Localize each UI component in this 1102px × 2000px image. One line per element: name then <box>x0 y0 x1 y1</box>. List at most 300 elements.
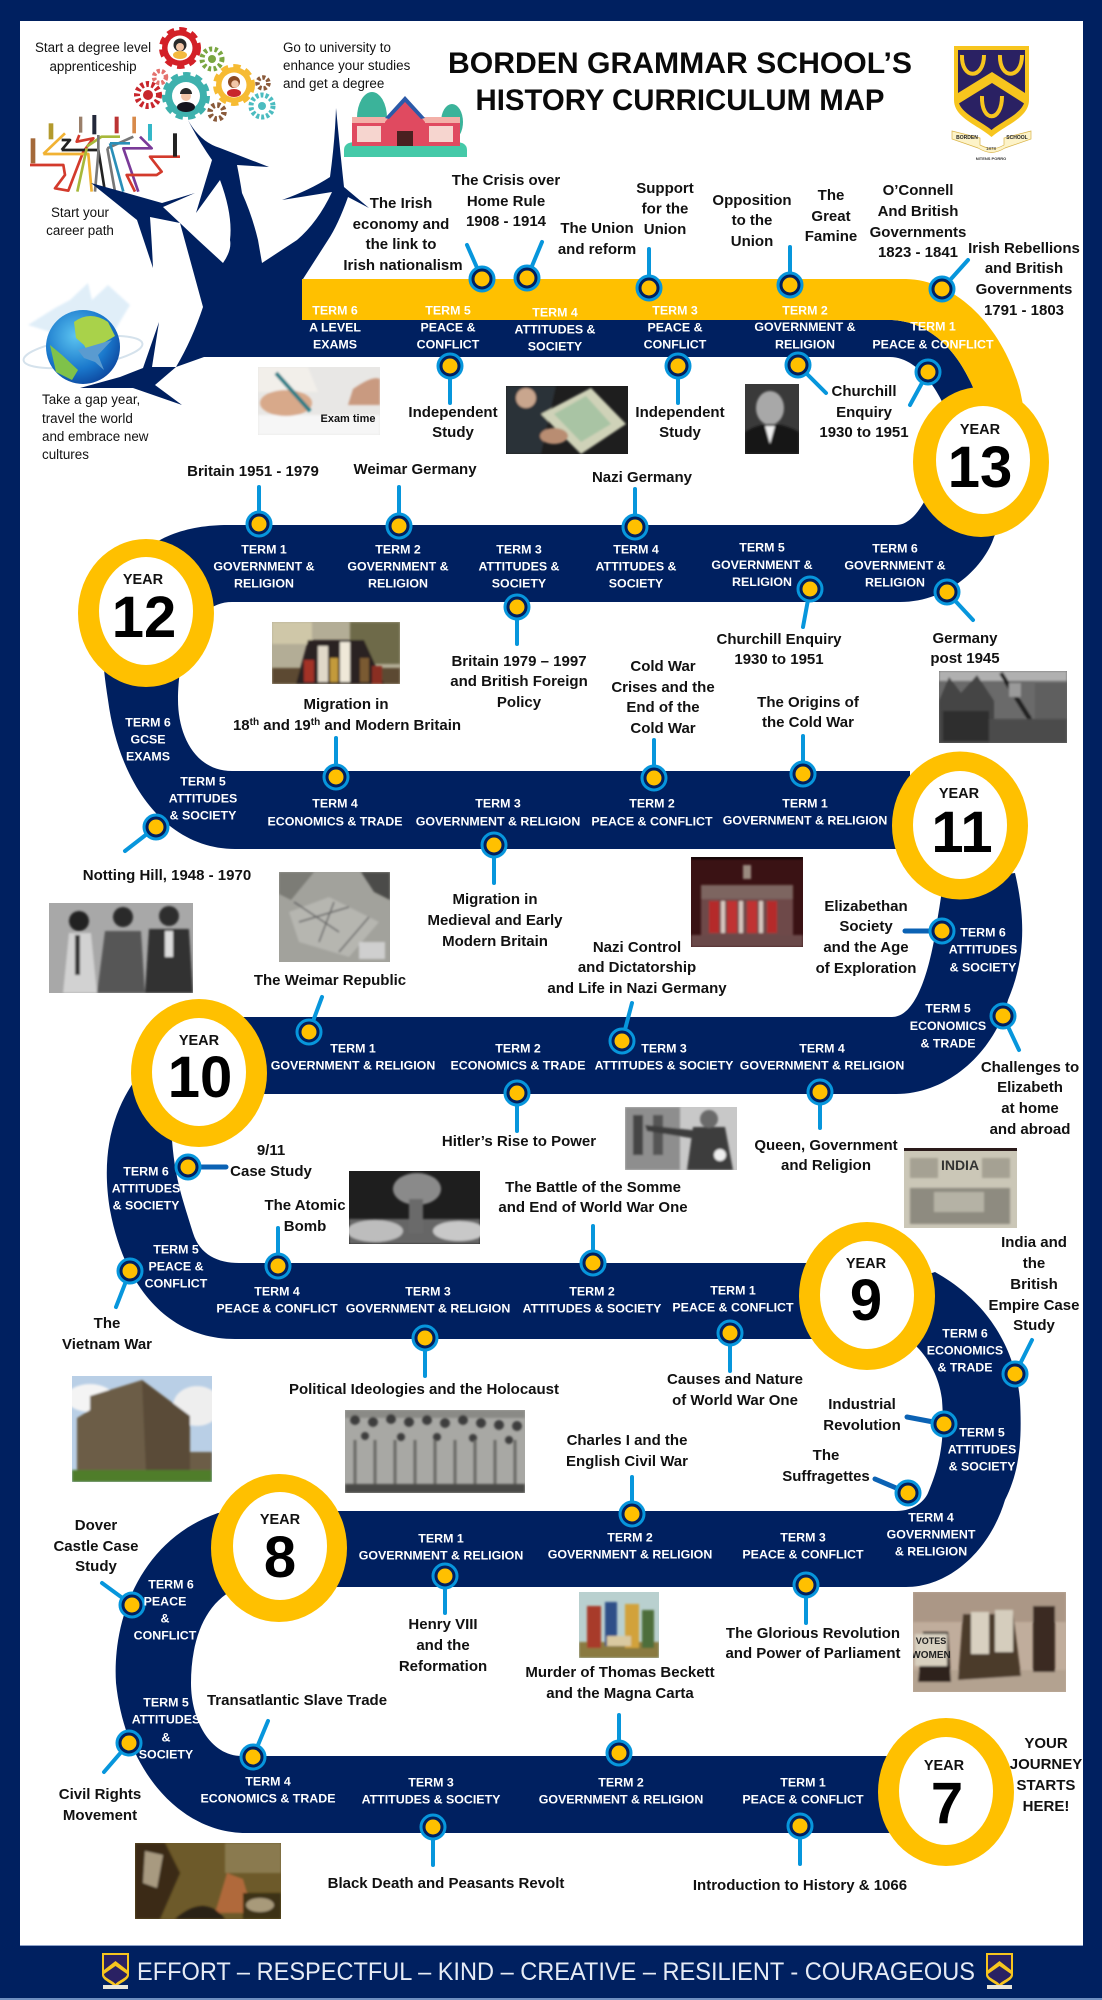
photo: votes for women: WOMEN <box>911 1650 951 1661</box>
icon: school crest: BORDEN <box>956 135 978 141</box>
pin: Opposition <box>778 247 802 297</box>
track: year 9 to year 7 <box>116 1272 1021 1833</box>
term 5 label: PEACE & <box>148 1260 204 1274</box>
pin: Nazi control <box>610 1003 634 1053</box>
text: Atomic Bomb: Bomb <box>284 1218 326 1235</box>
term 4 label: TERM 4 <box>312 796 358 810</box>
term 6 label: EXAMS <box>313 338 357 352</box>
text: Causes of WW1: Causes and Nature <box>667 1371 803 1388</box>
term 5 label: & SOCIETY <box>949 1460 1016 1474</box>
text: India: Empire Case <box>989 1297 1079 1314</box>
pin: Civil Rights <box>104 1731 141 1772</box>
term 5 label: CONFLICT <box>417 338 480 352</box>
text: Political Ideologies: Political Ideologies and the Holocaust <box>289 1381 559 1398</box>
text: gap year: and embrace new <box>42 429 149 444</box>
panel: year 7 <box>59 1692 1082 1919</box>
term 5 label: SOCIETY <box>139 1748 194 1762</box>
photo: reading a book <box>506 386 628 454</box>
photo: migration painting <box>272 622 400 684</box>
term 5 label: CONFLICT <box>145 1276 208 1290</box>
term 2 label: TERM 2 <box>782 304 828 318</box>
year 9 badge: YEAR <box>846 1256 887 1272</box>
text: Challenges to Elizabeth: at home <box>1001 1100 1059 1117</box>
pin: Independent Study 2 <box>666 354 690 403</box>
pin: Union and reform <box>637 249 661 300</box>
term 1 label: TERM 1 <box>418 1532 464 1546</box>
text: Crisis over Home Rule: 1908 - 1914 <box>466 213 547 230</box>
text: Irish Rebellions: 1791 - 1803 <box>984 302 1064 319</box>
pin: Independent Study 1 <box>438 354 462 403</box>
term 2 label: ECONOMICS & TRADE <box>451 1058 585 1072</box>
term 6 label: TERM 6 <box>942 1326 988 1340</box>
text: Cold War crises: Crises and the <box>611 679 715 696</box>
text: Irish Rebellions: Governments <box>976 281 1072 298</box>
term 3 label: GOVERNMENT & RELIGION <box>346 1302 510 1316</box>
icon: school building <box>344 92 467 157</box>
text: Churchill Enquiry: Enquiry <box>836 404 893 421</box>
term 5 label: RELIGION <box>732 575 792 589</box>
term 4 label: & RELIGION <box>895 1544 967 1558</box>
term 2 label: TERM 2 <box>375 542 421 556</box>
term 4 label: ATTITUDES & <box>596 560 677 574</box>
text: Vietnam War: Vietnam War <box>62 1336 152 1353</box>
photo: India newspaper: INDIA <box>941 1157 979 1173</box>
text: O'Connell: Governments <box>870 224 966 241</box>
text: Dover Castle: Study <box>75 1558 117 1575</box>
text: Challenges to Elizabeth: Challenges to <box>981 1059 1079 1076</box>
term 1 label: TERM 1 <box>710 1284 756 1298</box>
text: Migration medieval: Modern Britain <box>442 933 548 950</box>
footer bar <box>0 1945 1102 2000</box>
text: Notting Hill: Notting Hill, 1948 - 1970 <box>83 867 251 884</box>
text: Britain 1951-1979: Britain 1951 - 1979 <box>187 463 319 480</box>
term 5 label: GOVERNMENT & <box>711 558 813 572</box>
text: university: Go to university to <box>283 40 391 55</box>
text: Elizabethan Society: and the Age <box>823 939 909 956</box>
term 4 label: GOVERNMENT <box>887 1528 976 1542</box>
term 5 label: TERM 5 <box>153 1242 199 1256</box>
year 8 badge: YEAR <box>260 1512 301 1528</box>
year 9 badge: 9 <box>850 1268 882 1333</box>
term 5 label: TERM 5 <box>425 304 471 318</box>
text: India: India and <box>1001 1234 1067 1251</box>
text: Germany post 1945: Germany <box>932 630 998 647</box>
photo: plague <box>135 1843 281 1919</box>
term 5 label: & <box>162 1730 171 1744</box>
term 1 label: GOVERNMENT & RELIGION <box>723 814 887 828</box>
title: HISTORY CURRICULUM MAP <box>476 84 884 117</box>
text: Irish economy: economy and <box>353 216 449 233</box>
panel: year 12 <box>78 487 1067 743</box>
text: Challenges to Elizabeth: Elizabeth <box>997 1079 1063 1096</box>
icon: school crest: SCHOOL <box>1006 135 1028 141</box>
term 4 label: TERM 4 <box>908 1510 954 1524</box>
term 3 label: PEACE & <box>647 320 703 334</box>
text: Independent Study 2: Independent <box>635 404 725 421</box>
pin: Germany post 1945 <box>935 580 973 620</box>
text: Migration medieval: Medieval and Early <box>427 912 563 929</box>
text: gap year: cultures <box>42 447 89 462</box>
text: Industrial Revolution: Revolution <box>823 1417 901 1434</box>
text: Challenges to Elizabeth: and abroad <box>990 1121 1070 1138</box>
year 10 badge <box>131 999 267 1147</box>
term 1 label: TERM 1 <box>782 796 828 810</box>
text: Independent Study 1: Independent <box>408 404 498 421</box>
text: Independent Study 2: Study <box>659 424 701 441</box>
text: Glorious Revolution: The Glorious Revolution <box>726 1625 900 1642</box>
text: university: enhance your studies <box>283 58 411 73</box>
term 6 label: ATTITUDES <box>112 1182 180 1196</box>
text: India: Study <box>1013 1317 1055 1334</box>
term 5 label: ATTITUDES <box>132 1712 200 1726</box>
text: Churchill Enquiry: Churchill Enquiry <box>716 631 842 648</box>
term 4 label: ATTITUDES & <box>514 322 596 336</box>
term 3 label: TERM 3 <box>496 542 542 556</box>
text: Charles I: English Civil War <box>566 1453 688 1470</box>
title: BORDEN GRAMMAR SCHOOL’S <box>448 47 912 80</box>
text: journey starts here: YOUR <box>1024 1735 1068 1752</box>
pin: Weimar Republic <box>297 997 322 1044</box>
term 3 label: TERM 3 <box>475 796 521 810</box>
term 3 label: SOCIETY <box>492 576 547 590</box>
term 3 label: PEACE & CONFLICT <box>742 1548 864 1562</box>
text: Churchill Enquiry: 1930 to 1951 <box>819 424 909 441</box>
term 3 label: TERM 3 <box>652 304 698 318</box>
photo: votes for women <box>911 1592 1066 1692</box>
term 1 label: PEACE & CONFLICT <box>872 338 994 352</box>
text: Civil Rights: Civil Rights <box>59 1786 141 1803</box>
text: Irish economy: Irish nationalism <box>343 257 463 274</box>
term 2 label: RELIGION <box>368 576 428 590</box>
photo: Brandenburg Gate <box>691 857 803 947</box>
term 5 label: ATTITUDES <box>169 792 237 806</box>
term 4 label: SOCIETY <box>609 576 664 590</box>
photo: map <box>279 872 390 962</box>
term 6 label: TERM 6 <box>872 542 918 556</box>
text: Nazi control: Nazi Control <box>593 939 681 956</box>
photo: exam time <box>258 367 380 435</box>
panel: year 11 <box>49 658 1028 1050</box>
pin: Churchill Enquiry <box>786 353 826 393</box>
term 2 label: TERM 2 <box>607 1530 653 1544</box>
pin: Irish Rebellions <box>930 260 968 301</box>
pin: India <box>1003 1340 1032 1386</box>
term 6 label: A LEVEL <box>309 320 361 334</box>
term 3 label: ATTITUDES & SOCIETY <box>595 1058 734 1072</box>
term 4 label: PEACE & CONFLICT <box>216 1302 338 1316</box>
panel: year 10 <box>62 939 1079 1353</box>
term 5 label: TERM 5 <box>739 540 785 554</box>
year 7 badge: YEAR <box>924 1758 965 1774</box>
text: Dover Castle: Castle Case <box>53 1538 139 1555</box>
pin: Weimar Germany <box>387 487 411 538</box>
pin: Black Death <box>421 1815 445 1865</box>
pin: Challenges to Elizabeth <box>991 1004 1019 1050</box>
text: Henry VIII: Henry VIII <box>408 1616 478 1633</box>
term 2 label: GOVERNMENT & RELIGION <box>548 1548 712 1562</box>
term 6 label: & TRADE <box>937 1360 993 1374</box>
icon: gears with people <box>137 30 273 119</box>
year 10 badge: 10 <box>168 1045 232 1110</box>
term 2 label: TERM 2 <box>629 796 675 810</box>
pin: Henry VIII <box>433 1564 457 1613</box>
text: Churchill Enquiry: Churchill <box>831 383 897 400</box>
text: journey starts here: HERE! <box>1023 1798 1069 1815</box>
text: Cold War crises: Cold War <box>630 658 696 675</box>
text: Support for the Union: for the <box>642 200 688 218</box>
text: Battle of the Somme: and End of World War One <box>498 1199 688 1216</box>
text: Origins of Cold War: The Origins of <box>757 694 860 711</box>
year 7 badge: 7 <box>931 1771 963 1836</box>
year 8 badge <box>211 1474 347 1622</box>
text: Causes of WW1: of World War One <box>672 1392 798 1409</box>
term 4 label: TERM 4 <box>254 1284 300 1298</box>
text: Murder of Thomas Beckett: Murder of Thomas Beckett <box>525 1664 715 1681</box>
term 1 label: TERM 1 <box>241 542 287 556</box>
term 6 attitudes label: TERM 6 <box>960 926 1006 940</box>
pin: Cold War crises <box>642 740 666 790</box>
term 5 economics label: ECONOMICS <box>910 1019 986 1033</box>
text: Henry VIII: Reformation <box>399 1658 487 1675</box>
text: gap year: travel the world <box>42 411 133 426</box>
text: Nazi control: and Dictatorship <box>578 959 696 976</box>
term 6 label: TERM 6 <box>123 1164 169 1178</box>
text: Industrial Revolution: Industrial <box>828 1396 896 1413</box>
icon: school crest <box>952 46 1031 161</box>
text: Origins of Cold War: the Cold War <box>762 714 854 731</box>
pin: Battle of the Somme <box>581 1226 605 1275</box>
photo: atomic bomb <box>349 1171 480 1244</box>
term 6 attitudes label: & SOCIETY <box>950 960 1017 974</box>
term 6 label: GOVERNMENT & <box>844 558 946 572</box>
text: Support for the Union: Support <box>636 180 694 197</box>
term 4 label: ECONOMICS & TRADE <box>201 1792 335 1806</box>
term 1 label: GOVERNMENT & RELIGION <box>359 1548 523 1562</box>
term 5 label: TERM 5 <box>959 1426 1005 1440</box>
term 6 attitudes label: ATTITUDES <box>949 942 1017 956</box>
text: Introduction: Introduction to History & 1066 <box>693 1877 907 1894</box>
pin: Causes of WW1 <box>718 1321 742 1371</box>
photo: exam time: Exam time <box>320 413 376 425</box>
term 2 label: GOVERNMENT & RELIGION <box>539 1792 703 1806</box>
text: Cold War crises: Cold War <box>630 720 696 737</box>
term 1 label: GOVERNMENT & <box>213 560 315 574</box>
term 2 label: TERM 2 <box>495 1042 541 1056</box>
pin: Britain 1951 <box>247 487 271 536</box>
text: Germany post 1945: post 1945 <box>930 650 1000 667</box>
year 13 badge: YEAR <box>960 422 1001 438</box>
term 6 label: RELIGION <box>865 576 925 590</box>
text: Dover Castle: Dover <box>75 1517 117 1534</box>
pin: Migration modern <box>324 738 348 789</box>
text: apprenticeship: Start a degree level <box>35 40 151 55</box>
term 5 economics label: & TRADE <box>920 1036 976 1050</box>
text: Great Famine: The <box>818 187 844 204</box>
pin: Vietnam War <box>116 1259 142 1307</box>
pin: Atomic Bomb <box>266 1228 290 1278</box>
year 13 badge <box>913 387 1049 537</box>
term 4 label: ECONOMICS & TRADE <box>268 814 402 828</box>
pin: Introduction <box>788 1814 812 1864</box>
term 4 label: TERM 4 <box>799 1042 845 1056</box>
term 4 label: TERM 4 <box>532 306 578 320</box>
term 6 label: PEACE <box>144 1594 186 1608</box>
term 2 label: GOVERNMENT & <box>347 560 449 574</box>
term 5 label: TERM 5 <box>180 774 226 788</box>
icon: footer crest left <box>102 1953 129 1989</box>
panel: year 13 <box>187 172 1080 537</box>
term 6 label: TERM 6 <box>148 1578 194 1592</box>
text: Elizabethan Society: Elizabethan <box>824 898 908 915</box>
panel: year 8 <box>53 1474 1066 1772</box>
text: Cold War crises: End of the <box>626 699 700 716</box>
pin: Home Rule <box>515 242 542 290</box>
text: Great Famine: Famine <box>805 228 857 245</box>
text: Nazi control: and Life in Nazi Germany <box>547 980 727 997</box>
term 4 label: TERM 4 <box>245 1774 291 1788</box>
term 3 label: TERM 3 <box>641 1042 687 1056</box>
tree branching from the track <box>80 108 369 405</box>
text: O'Connell: And British <box>878 203 958 220</box>
text: journey starts here: STARTS <box>1017 1777 1075 1794</box>
term 3 label: GOVERNMENT & RELIGION <box>416 814 580 828</box>
text: Irish economy: The Irish <box>370 195 432 212</box>
pin: Political Ideologies <box>413 1326 437 1376</box>
text: Hitler's Rise: Hitler’s Rise to Power <box>442 1133 596 1150</box>
panel: year 9 <box>66 1222 1079 1505</box>
text: India: the <box>1023 1255 1045 1272</box>
term 2 label: RELIGION <box>775 338 835 352</box>
icon: globe <box>22 283 144 384</box>
text: O'Connell: 1823 - 1841 <box>878 244 958 261</box>
text: Independent Study 1: Study <box>432 424 474 441</box>
year 11 badge: YEAR <box>939 786 980 802</box>
pin: Origins of Cold War <box>791 736 815 786</box>
track: year 13 navy curve <box>204 320 975 408</box>
text: 9/11: 9/11 <box>257 1142 285 1159</box>
text: Migration 18th 19th: 18 <box>233 717 461 734</box>
photo: prisoners <box>345 1410 525 1493</box>
year 12 badge <box>78 539 214 687</box>
term 6 label: TERM 6 <box>312 304 358 318</box>
text: journey starts here: JOURNEY <box>1010 1756 1082 1773</box>
text: India: British <box>1010 1276 1058 1293</box>
text: university: and get a degree <box>283 76 384 91</box>
term 2 label: PEACE & CONFLICT <box>591 814 713 828</box>
text: Britain 1979-1997: Policy <box>497 694 542 711</box>
text: Queen Government: Queen, Government <box>754 1137 898 1154</box>
text: Britain 1979-1997: Britain 1979 – 1997 <box>451 653 587 670</box>
term 1 label: RELIGION <box>234 576 294 590</box>
term 1 label: PEACE & CONFLICT <box>742 1792 864 1806</box>
text: Union and reform: and reform <box>558 241 636 258</box>
pin: Industrial Revolution <box>907 1412 956 1436</box>
text: Migration 18th 19th: and 19 <box>259 717 311 734</box>
year 12 badge: 12 <box>112 585 176 650</box>
photo: Magna Carta <box>579 1592 659 1658</box>
term 4 label: GOVERNMENT & RELIGION <box>740 1058 904 1072</box>
pin: Suffragettes <box>875 1479 920 1505</box>
photo: Dover Castle <box>72 1376 212 1482</box>
term 6 label: & SOCIETY <box>113 1198 180 1212</box>
term 2 label: ATTITUDES & SOCIETY <box>523 1302 662 1316</box>
pin: Transatlantic Slave Trade <box>241 1721 268 1769</box>
text: O'Connell: O’Connell <box>883 182 953 199</box>
text: Nazi Germany: Nazi Germany <box>592 469 693 486</box>
term 6 label: CONFLICT <box>134 1628 197 1642</box>
year 7 badge <box>878 1718 1014 1866</box>
term 6 label: TERM 6 <box>125 716 171 730</box>
track: year 12 to year 11 <box>103 495 1000 849</box>
pin: Glorious Revolution <box>794 1573 818 1623</box>
pin: Hitler's Rise <box>505 1081 529 1131</box>
pin: term 1 <box>910 360 940 405</box>
term 3 label: TERM 3 <box>780 1530 826 1544</box>
year 11 badge <box>892 752 1028 900</box>
term 3 label: ATTITUDES & <box>478 560 560 574</box>
term 6 label: GCSE <box>130 732 166 746</box>
text: Suffragettes: Suffragettes <box>782 1468 870 1485</box>
icon: footer crest right <box>986 1953 1013 1989</box>
text: Atomic Bomb: The Atomic <box>264 1197 346 1214</box>
text: Transatlantic Slave Trade: Transatlantic Slave Trade <box>207 1692 387 1709</box>
pin: 9/11 <box>176 1155 226 1179</box>
title <box>448 47 912 117</box>
text: Elizabethan Society: Society <box>839 918 893 935</box>
text: Opposition to the Union: Opposition <box>712 192 792 209</box>
photo: votes for women: VOTES <box>916 1636 946 1646</box>
term 2 label: GOVERNMENT & <box>754 320 856 334</box>
pin: Nazi Germany <box>623 489 647 539</box>
term 5 label: TERM 5 <box>143 1696 189 1710</box>
text: Elizabethan Society: of Exploration <box>816 960 916 977</box>
photo: Hitler <box>625 1107 737 1170</box>
text: Opposition to the Union: Union <box>731 233 773 250</box>
photo: Notting Hill <box>49 903 193 993</box>
text: Irish Rebellions: Irish Rebellions <box>968 240 1080 257</box>
text: Migration medieval: Migration in <box>452 891 538 908</box>
track: year 11 to year 9 <box>107 873 1022 1339</box>
pin: Churchill Enquiry <box>798 577 822 627</box>
term 2 label: TERM 2 <box>569 1284 615 1298</box>
text: Black Death: Black Death and Peasants Revolt <box>328 1875 564 1892</box>
term 5 economics label: TERM 5 <box>925 1002 971 1016</box>
pin: Irish economy <box>467 245 494 291</box>
pin: Notting Hill <box>125 815 168 851</box>
term 6 label: EXAMS <box>126 750 170 764</box>
text: Britain 1979-1997: and British Foreign <box>450 673 588 690</box>
text: Opposition to the Union: to the <box>732 212 772 229</box>
term 3 label: CONFLICT <box>644 338 707 352</box>
photo: ruined Germany <box>939 671 1067 743</box>
term 6 label: ECONOMICS <box>927 1344 1003 1358</box>
year 12 badge: YEAR <box>123 572 164 588</box>
term 5 label: PEACE & <box>420 320 476 334</box>
text: Migration 18th 19th: and Modern Britain <box>320 717 461 734</box>
text: Battle of the Somme: The Battle of the Somme <box>505 1179 681 1196</box>
text: Crisis over Home Rule: Home Rule <box>467 193 545 210</box>
term 4 label: TERM 4 <box>613 542 659 556</box>
text: Support for the Union: Union <box>644 221 686 238</box>
track: year 13 gold band <box>302 279 1030 440</box>
term 2 label: TERM 2 <box>598 1776 644 1790</box>
text: Charles I: Charles I and the <box>567 1432 687 1449</box>
term 3 label: ATTITUDES & SOCIETY <box>362 1792 501 1806</box>
pin: Charles I <box>620 1477 644 1526</box>
year 8 badge: 8 <box>264 1525 296 1590</box>
term 1 label: TERM 1 <box>330 1042 376 1056</box>
text: apprenticeship: apprenticeship <box>49 59 137 74</box>
